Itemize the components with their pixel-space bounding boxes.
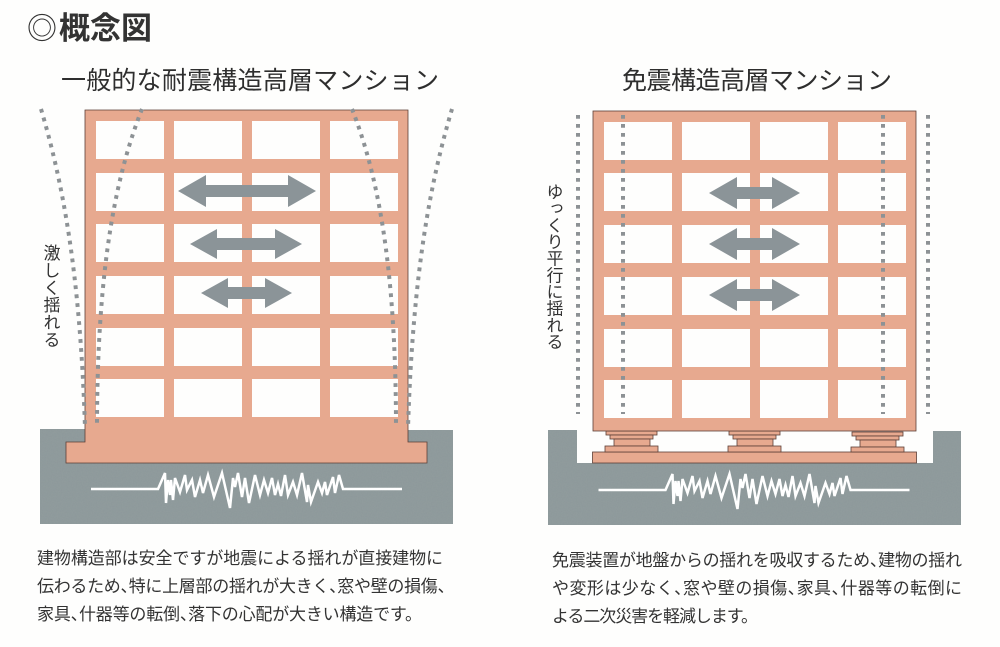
seismic wave: isolated xyxy=(598,474,910,509)
ground: isolated xyxy=(548,430,961,525)
base slab xyxy=(592,452,916,463)
text block: isolated description: や変形は少なく、窓や壁の損傷、家具、什器等の転倒に xyxy=(552,579,962,598)
panel: seismically isolated building xyxy=(548,111,961,525)
dotted parallel lines: isolated xyxy=(578,115,928,414)
label: slow parallel shaking: ゆっくり平行に揺れる xyxy=(544,183,563,350)
heading: conventional tower: 一般的な耐震構造高層マンション xyxy=(61,67,439,95)
isolator: left xyxy=(605,431,658,452)
isolator: centre xyxy=(728,431,781,452)
text block: isolated description xyxy=(552,551,962,626)
ground: conventional xyxy=(40,429,453,524)
arrow: lower floor sway xyxy=(201,278,292,308)
title: ◎ xyxy=(27,13,57,46)
text block: conventional description xyxy=(37,549,446,624)
arrow: middle floor gentle sway xyxy=(709,228,800,260)
title: 概念図 xyxy=(59,11,152,46)
seismic wave: conventional xyxy=(91,473,402,508)
heading: isolated tower: 免震構造高層マンション xyxy=(622,67,892,95)
text block: isolated description: 免震装置が地盤からの揺れを吸収するため、建物の揺れ xyxy=(552,551,962,570)
text block: isolated description: よる二次災害を軽減します。 xyxy=(552,607,758,626)
building frame: conventional xyxy=(66,110,427,463)
arrow: top floor large sway xyxy=(178,175,316,207)
arrow: lower floor gentle sway xyxy=(709,279,800,311)
label: violent shaking: 激しく揺れる xyxy=(40,244,60,348)
arrow: upper floor gentle sway xyxy=(709,177,800,209)
text block: conventional description: 伝わるため、特に上層部の揺れが大きく、窓や壁の損傷、 xyxy=(37,577,446,596)
text block: conventional description: 建物構造部は安全ですが地震による揺れが直接建物に xyxy=(37,549,443,568)
arrow: middle floor sway xyxy=(190,229,302,259)
panel: conventional earthquake-resistant building xyxy=(40,109,453,524)
dotted sway curves: conventional xyxy=(41,109,452,428)
building frame: isolated xyxy=(593,111,916,431)
isolator: right xyxy=(851,432,904,452)
text block: conventional description: 家具、什器等の転倒、落下の心配が大きい構造です。 xyxy=(37,605,422,624)
